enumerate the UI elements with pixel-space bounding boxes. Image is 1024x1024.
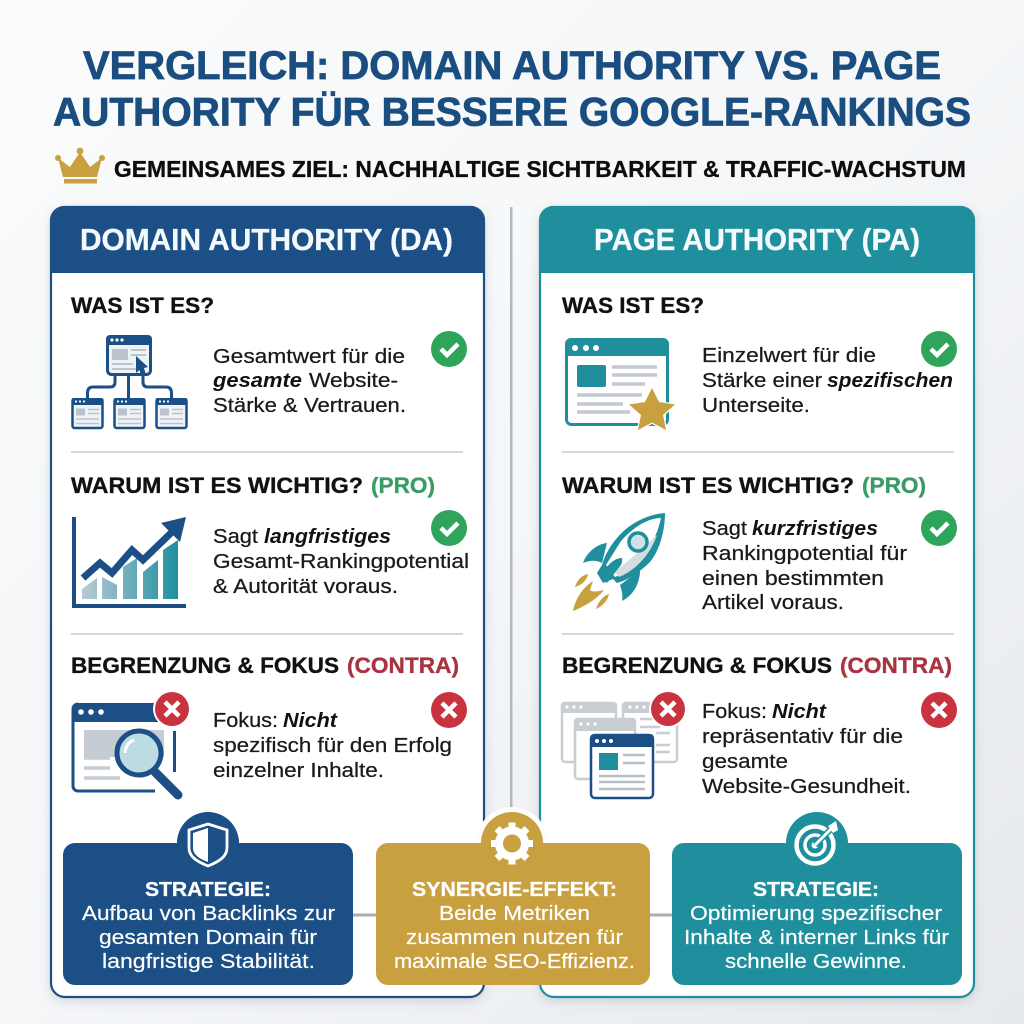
text: warum: Artikel voraus. (702, 592, 844, 614)
icon: red cross (921, 692, 957, 728)
text: begrenzung: Fokus: (213, 710, 278, 732)
title: VERGLEICH: DOMAIN AUTHORITY VS. PAGE (83, 44, 941, 88)
heading: begrenzung: BEGRENZUNG & FOKUS (71, 653, 339, 678)
text: was ist es (212, 346, 406, 417)
text: was ist es: Unterseite. (702, 395, 810, 417)
text: strategie page (684, 879, 949, 973)
icon: green check (431, 331, 467, 367)
icon: web page with star (565, 338, 677, 432)
panel header: page authority (539, 206, 975, 273)
heading: warum: (PRO) (371, 473, 435, 498)
text: warum: einen bestimmten (702, 568, 884, 590)
text: strategie page: Inhalte & interner Links für (684, 927, 949, 949)
text: begrenzung: einzelner Inhalte. (213, 760, 384, 782)
text: warum: Gesamt-Rankingpotential (213, 551, 469, 573)
text: synergie-effekt: maximale SEO-Effizienz. (394, 951, 635, 973)
text: begrenzung: repräsentativ für die (702, 726, 903, 748)
text: was ist es: gesamte (212, 370, 302, 392)
text: was ist es: spezifischen (827, 370, 953, 392)
text: was ist es: Stärke & Vertrauen. (213, 395, 406, 417)
text: strategie page: STRATEGIE: (753, 879, 879, 901)
icon: stacked web pages (561, 690, 687, 798)
icon: red cross (431, 692, 467, 728)
title (53, 44, 971, 134)
heading: begrenzung (562, 653, 952, 678)
text: strategie domain: gesamten Domain für (99, 927, 317, 949)
heading: was ist es: WAS IST ES? (562, 293, 704, 318)
text: strategie domain: Aufbau von Backlinks zur (82, 903, 335, 925)
text: was ist es: Gesamtwert für die (213, 346, 405, 368)
panel header: page authority: PAGE AUTHORITY (PA) (594, 223, 920, 257)
text: synergie-effekt: zusammen nutzen für (406, 927, 623, 949)
text: strategie page: Optimierung spezifischer (690, 903, 942, 925)
text: synergie-effekt (394, 879, 635, 973)
text: synergie-effekt: Beide Metriken (439, 903, 590, 925)
icon: crown (55, 148, 105, 184)
text: warum: langfristiges (264, 526, 391, 548)
icon: site hierarchy (72, 335, 188, 428)
text: begrenzung: Nicht (772, 701, 827, 723)
text: strategie domain (82, 879, 335, 973)
icon: gear (491, 822, 533, 864)
panel: page authority (539, 206, 975, 997)
text: begrenzung (702, 701, 911, 798)
heading: warum: (PRO) (862, 473, 926, 498)
icon: growth chart (74, 517, 186, 606)
icon: green check (921, 510, 957, 546)
text: synergie-effekt: SYNERGIE-EFFEKT: (412, 879, 617, 901)
text: begrenzung: Fokus: (702, 701, 767, 723)
text: begrenzung: gesamte (702, 751, 788, 773)
text: begrenzung: spezifisch für den Erfolg (213, 735, 452, 757)
text: begrenzung: Website-Gesundheit. (702, 776, 911, 798)
text: warum: kurzfristiges (752, 518, 878, 540)
heading: warum: WARUM IST ES WICHTIG? (71, 473, 363, 498)
text: was ist es: Einzelwert für die (702, 345, 876, 367)
text: strategie domain: STRATEGIE: (145, 879, 271, 901)
text: warum: Sagt (213, 526, 258, 548)
text: was ist es (702, 345, 953, 417)
icon: green check (921, 331, 957, 367)
icon: magnifier on window (72, 690, 191, 795)
heading: begrenzung (71, 653, 459, 678)
heading: begrenzung: (CONTRA) (840, 653, 952, 678)
callout: synergie-effekt (376, 807, 650, 985)
text: warum: Rankingpotential für (702, 543, 907, 565)
text: warum: & Autorität voraus. (213, 576, 398, 598)
text: begrenzung (213, 710, 452, 782)
center divider (510, 207, 512, 817)
icon: shield (189, 824, 227, 866)
text: was ist es: Website- (309, 370, 398, 392)
callout: strategie domain (63, 812, 353, 985)
icon: green check (431, 510, 467, 546)
panel header: domain authority: DOMAIN AUTHORITY (DA) (80, 223, 453, 257)
icon: rocket (573, 513, 665, 611)
text: begrenzung: Nicht (283, 710, 338, 732)
heading: was ist es: WAS IST ES? (71, 293, 214, 318)
text: warum (213, 526, 469, 598)
text: warum (702, 518, 907, 614)
heading: begrenzung: BEGRENZUNG & FOKUS (562, 653, 832, 678)
text: strategie domain: langfristige Stabilität. (102, 951, 315, 973)
subtitle: GEMEINSAMES ZIEL: NACHHALTIGE SICHTBARKEIT & TRAFFIC-WACHSTUM (114, 156, 966, 182)
text: was ist es: Stärke einer (702, 370, 822, 392)
callout: strategie page (672, 812, 962, 985)
icon: target (796, 821, 838, 864)
heading: begrenzung: (CONTRA) (347, 653, 459, 678)
heading: warum: WARUM IST ES WICHTIG? (562, 473, 854, 498)
panel: domain authority (50, 206, 485, 997)
title: AUTHORITY FÜR BESSERE GOOGLE-RANKINGS (53, 90, 971, 134)
text: strategie page: schnelle Gewinne. (725, 951, 907, 973)
panel header: domain authority (50, 206, 485, 273)
text: warum: Sagt (702, 518, 747, 540)
